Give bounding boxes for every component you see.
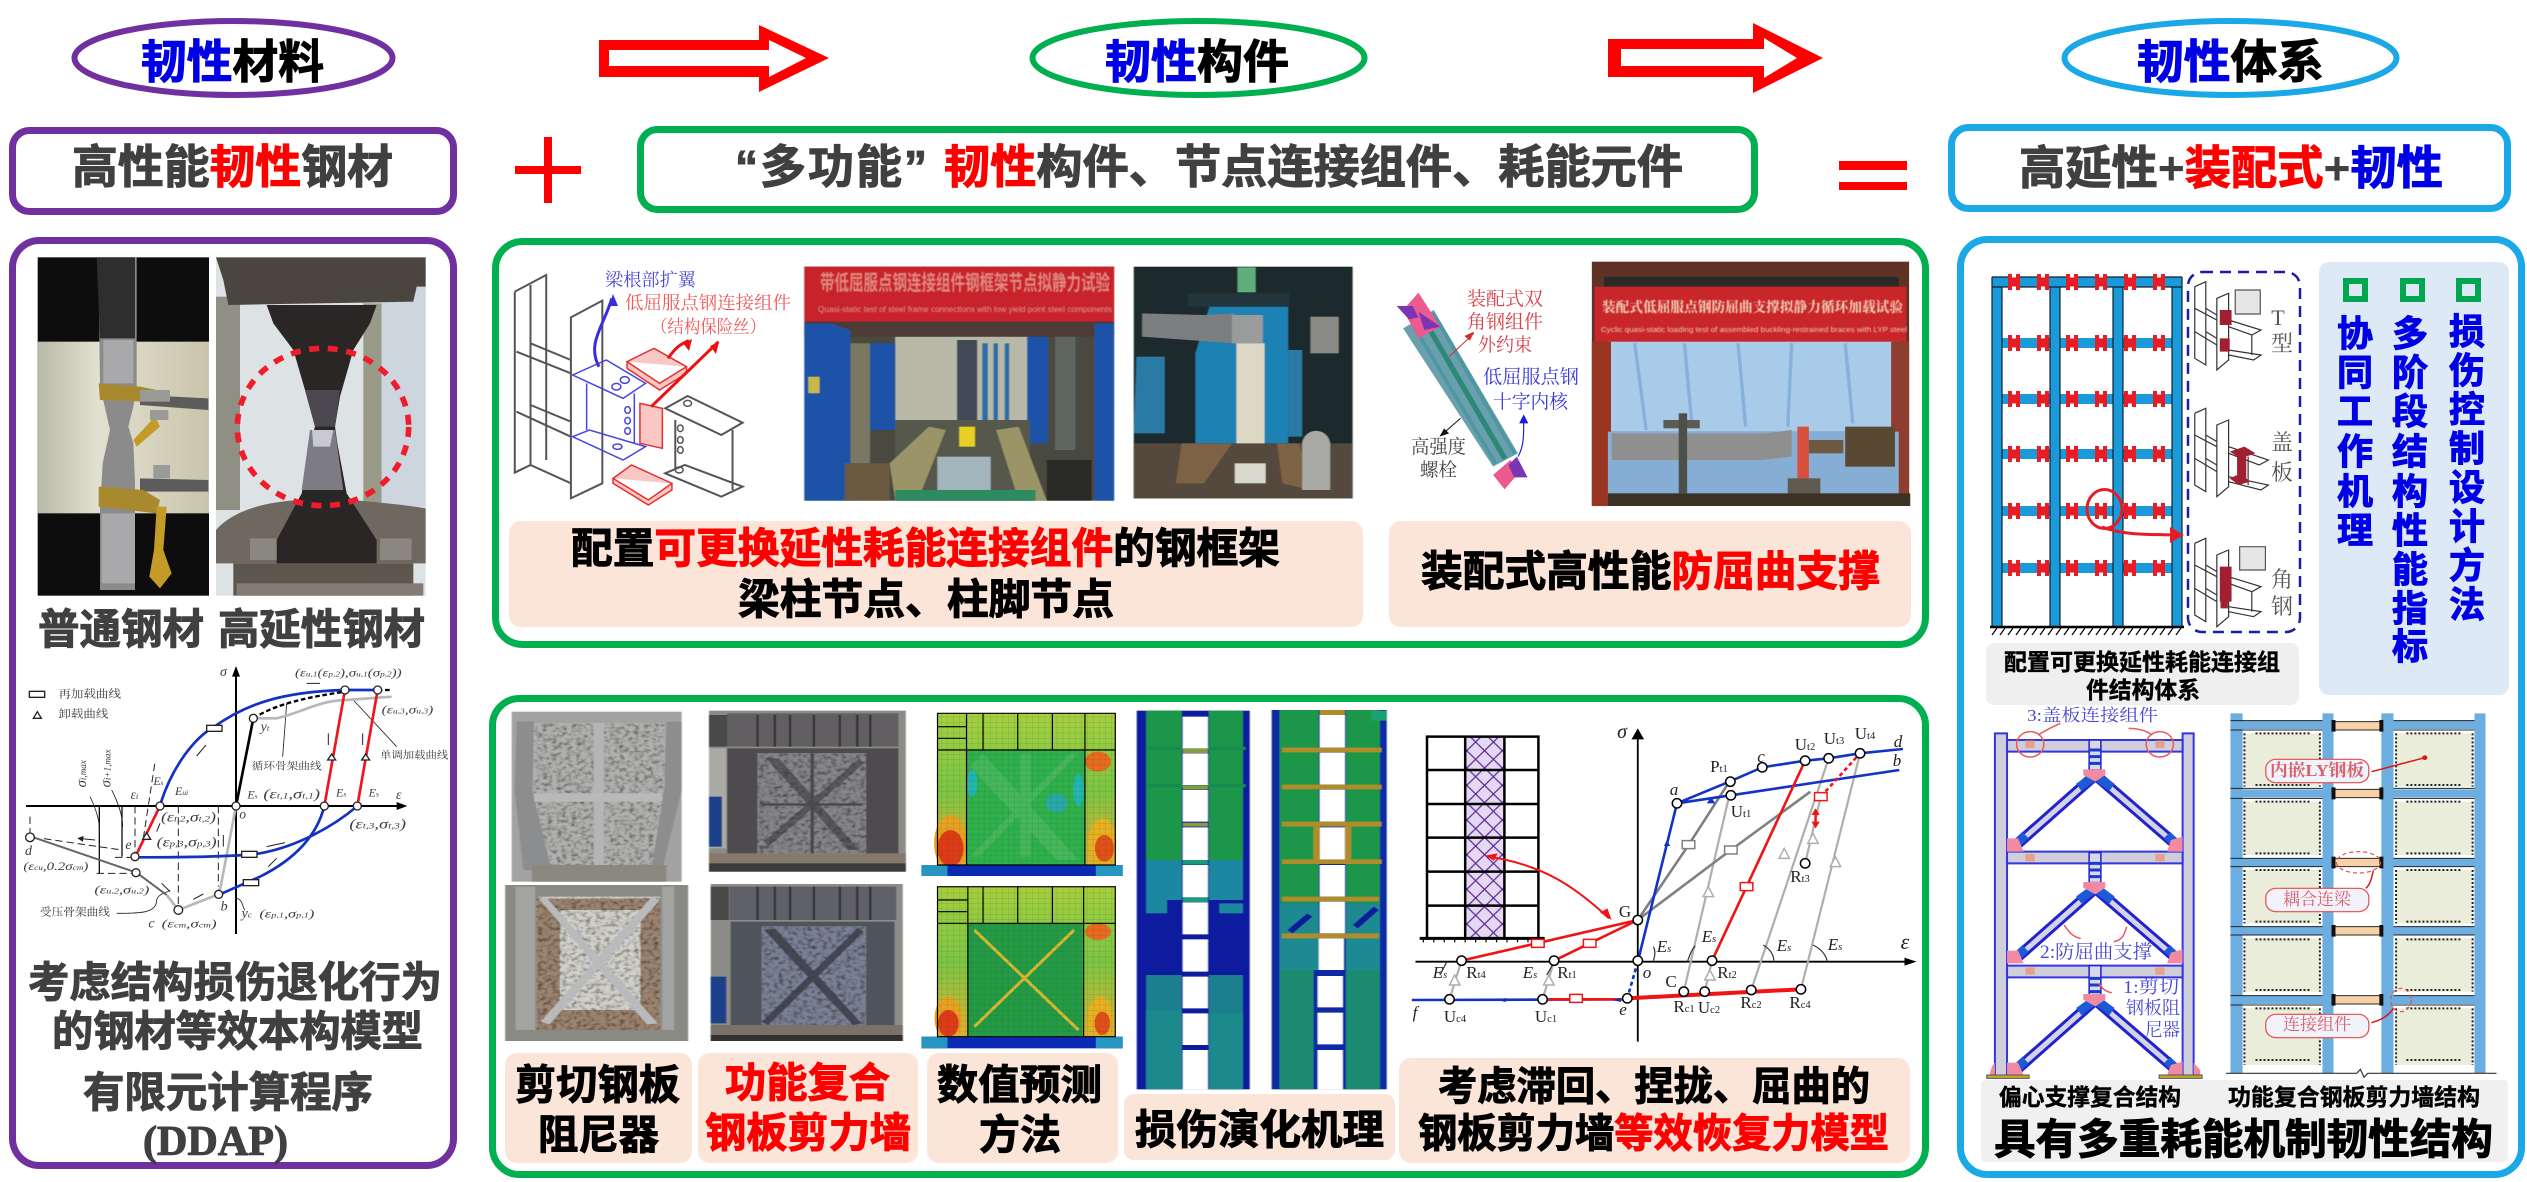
bullet list column: 多阶段结构性能指标: 多 [2392, 313, 2428, 354]
photo: beam-column joint test: Quasi-static test of steel frame connections with low yield point steel components [818, 305, 1112, 314]
caption: 剪切钢板阻尼器: 剪切钢板 [515, 1062, 680, 1108]
diagram: composite steel plate shear wall structure [2226, 713, 2497, 1077]
photo: beam-column joint test [804, 267, 1114, 501]
chart: equivalent restoring force model: Rt3 [1790, 867, 1810, 886]
chart: cyclic stress-strain constitutive model: o [239, 806, 246, 821]
caption: structure names and title [1981, 1080, 2508, 1163]
chart: cyclic stress-strain constitutive model: (εu,3,σu,3) [382, 702, 433, 716]
chart: equivalent restoring force model: Pt1 [1710, 757, 1728, 776]
chart: equivalent restoring force model [1412, 721, 1917, 1042]
caption: replaceable connection system: 配置可更换延性耗能连接组 [2004, 649, 2280, 675]
chart: cyclic stress-strain constitutive model: c [148, 916, 155, 931]
text: steel constitutive model: 考虑结构损伤退化行为 [28, 959, 442, 1006]
chart: equivalent restoring force model: Ut2 [1795, 735, 1815, 754]
bullet list column: 损伤控制设计方法: 计 [2449, 506, 2485, 547]
axes [26, 672, 402, 934]
chart: cyclic stress-strain constitutive model: σ [220, 665, 228, 680]
photo: brace cyclic test [1592, 262, 1910, 506]
caption: 功能复合钢板剪力墙: 功能复合 [725, 1060, 890, 1106]
chart: equivalent restoring force model: G [1619, 902, 1631, 921]
arrow: components to system [1608, 23, 1823, 93]
photo: composite steel plate shear wall [709, 711, 906, 1041]
chart: damage evolution frames [1137, 710, 1387, 1089]
photo: high ductility steel specimen [216, 257, 426, 596]
chart: cyclic stress-strain constitutive model: yt [259, 720, 270, 735]
chart: equivalent restoring force model: o [1643, 963, 1651, 982]
chart: cyclic stress-strain constitutive model: Eui [174, 784, 188, 798]
chart: cyclic stress-strain constitutive model: e [125, 838, 132, 853]
text: steel constitutive model: 的钢材等效本构模型 [52, 1008, 423, 1055]
chart: cyclic stress-strain constitutive model: (εcm,σcm) [162, 916, 217, 930]
chart: cyclic stress-strain constitutive model: (εt,3,σt,3) [349, 816, 407, 831]
diagram: eccentric brace composite structure: 钢板阻 [2126, 998, 2180, 1018]
chart: cyclic stress-strain constitutive model: (εp,3,σp,3) [157, 835, 217, 850]
chart: equivalent restoring force model: Es [1701, 927, 1716, 946]
photo: ordinary steel specimen [38, 257, 209, 596]
label: ordinary steel: 普通钢材 [38, 606, 204, 653]
heading oval: 韧性材料 [74, 21, 392, 95]
diagram: assembled buckling-restrained brace: 十字内核 [1493, 391, 1569, 413]
diagram: eccentric brace composite structure: 3:盖板连接组件 [2027, 706, 2158, 725]
caption: replaceable ductile connection [509, 521, 1363, 627]
bullet list column: 多阶段结构性能指标: 性 [2392, 510, 2428, 551]
diagram: composite steel plate shear wall structure: 连接组件 [2283, 1015, 2351, 1034]
bullet list column: 损伤控制设计方法: 控 [2449, 389, 2485, 430]
chart: equivalent restoring force model: Es [1432, 963, 1447, 982]
chart: cyclic stress-strain constitutive model: σi,max [74, 760, 90, 787]
chart: equivalent restoring force model: Uc4 [1444, 1007, 1467, 1026]
chart: cyclic stress-strain constitutive model: (εt,1,σt,1) [263, 786, 321, 801]
bullet list column: 协同工作机理: 机 [2337, 471, 2373, 512]
chart: equivalent restoring force model: Rt4 [1466, 963, 1486, 982]
caption: 数值预测方法: 数值预测 [937, 1062, 1102, 1108]
chart: equivalent restoring force model: C [1665, 972, 1677, 991]
chart: equivalent restoring force model: Es [1776, 936, 1791, 955]
heading oval: 韧性体系: 韧性体系 [2137, 36, 2324, 88]
diagram: assembled buckling-restrained brace: 低屈服点钢 [1483, 366, 1579, 388]
caption: 等效恢复力模型: 钢板剪力墙等效恢复力模型 [1418, 1112, 1889, 1156]
chart: equivalent restoring force model: Rt2 [1717, 963, 1737, 982]
diagram: connection types T, cover plate, angle [2188, 272, 2300, 632]
caption: replaceable connection system [1986, 643, 2299, 705]
caption: 等效恢复力模型 [1399, 1058, 1910, 1163]
chart: cyclic stress-strain constitutive model: d [25, 844, 33, 859]
diagram: assembled buckling-restrained brace: 螺栓 [1420, 459, 1457, 481]
bullet list column: 协同工作机理 [2337, 281, 2373, 551]
bullet list column: 多阶段结构性能指标: 标 [2392, 626, 2428, 667]
diagram: assembled buckling-restrained brace [1397, 288, 1579, 489]
caption: 功能复合钢板剪力墙: 钢板剪力墙 [705, 1110, 911, 1156]
photo: brace cyclic test: 装配式低屈服点钢防屈曲支撑拟静力循环加载试验 [1602, 299, 1903, 316]
caption: 功能复合钢板剪力墙 [698, 1053, 918, 1163]
chart: cyclic stress-strain constitutive model: (εu,2,σu,2) [94, 882, 149, 896]
panel: resilient structural system [1960, 240, 2522, 1174]
bullet list column: 多阶段结构性能指标: 指 [2392, 588, 2428, 629]
diagram: steel frame with replaceable connections [1990, 276, 2184, 635]
inset frame with shear wall [1420, 737, 1545, 942]
heading oval: 韧性构件: 韧性构件 [1105, 36, 1289, 88]
text: steel constitutive model [28, 959, 442, 1055]
heading oval: 韧性材料: 韧性材料 [141, 36, 324, 88]
chart: equivalent restoring force model: d [1894, 732, 1903, 751]
chart: numerical simulation contours [921, 713, 1123, 1048]
chart: equivalent restoring force model: Uc1 [1535, 1007, 1557, 1026]
diagram: eccentric brace composite structure [1987, 706, 2202, 1078]
chart: equivalent restoring force model: Rt1 [1557, 963, 1577, 982]
bullet list column: 损伤控制设计方法 [2449, 281, 2485, 625]
caption: 等效恢复力模型: 考虑滞回、捏拢、屈曲的 [1438, 1065, 1870, 1109]
banner: 多功能韧性构件 [640, 130, 1754, 210]
label: high ductility steel: 高延性钢材 [218, 606, 425, 653]
plus sign [515, 137, 581, 203]
chart: equivalent restoring force model: Es [1522, 963, 1537, 982]
chart: equivalent restoring force model: Rc2 [1740, 993, 1762, 1012]
caption: 数值预测方法: 方法 [979, 1112, 1061, 1158]
chart: cyclic stress-strain constitutive model: σi+1,max [99, 750, 115, 787]
diagram: replaceable beam-column connection: 梁根部扩翼 [605, 269, 697, 290]
heading oval: 韧性体系 [2064, 21, 2396, 95]
bullet list column: 损伤控制设计方法: 法 [2449, 584, 2485, 625]
caption: replaceable ductile connection: 配置可更换延性耗能连接组件的钢框架 [571, 525, 1280, 572]
caption: replaceable connection system: 件结构体系 [2086, 677, 2200, 703]
diagram: assembled buckling-restrained brace: 外约束 [1478, 334, 1532, 356]
bullet list column: 多阶段结构性能指标: 段 [2392, 391, 2428, 432]
bullet list column: 协同工作机理: 工 [2337, 391, 2373, 432]
photo: beam-column joint test: 带低屈服点钢连接组件钢框架节点拟静力试验 [820, 271, 1110, 295]
diagram: eccentric brace composite structure: 尼器 [2145, 1020, 2180, 1040]
chart: cyclic stress-strain constitutive model: 卸载曲线 [58, 708, 109, 721]
chart: cyclic stress-strain constitutive model: (εcu,0.2σ cm) [23, 859, 88, 873]
caption: buckling-restrained brace [1389, 521, 1911, 627]
text: finite element program: 有限元计算程序 [83, 1069, 373, 1116]
caption: structure names and title: 偏心支撑复合结构 [1999, 1084, 2181, 1110]
chart: equivalent restoring force model: Ut3 [1824, 729, 1844, 748]
diagram: assembled buckling-restrained brace: 高强度 [1411, 436, 1466, 458]
bullet list column: 协同工作机理: 理 [2337, 510, 2373, 551]
bullet list column: 多阶段结构性能指标: 能 [2392, 549, 2428, 590]
chart: equivalent restoring force model: Ut4 [1855, 724, 1876, 743]
caption: 损伤演化机理: 损伤演化机理 [1135, 1107, 1384, 1153]
chart: cyclic stress-strain constitutive model: Es [246, 787, 258, 801]
chart: equivalent restoring force model: Rc1 [1673, 997, 1695, 1016]
heading oval: 韧性构件 [1032, 21, 1364, 95]
diagram: assembled buckling-restrained brace: 角钢组件 [1467, 311, 1543, 333]
diagram: connection types T, cover plate, angle: 角 [2271, 567, 2293, 592]
chart: equivalent restoring force model: Uc2 [1698, 998, 1720, 1017]
bullet list column: 协同工作机理: 同 [2337, 352, 2373, 393]
chart: cyclic stress-strain constitutive model: (εt,2,σt,2) [161, 810, 217, 825]
banner: 高性能韧性钢材 [12, 130, 454, 212]
bullet list column: 协同工作机理: 协 [2337, 313, 2373, 354]
diagram: replaceable beam-column connection: （结构保险丝） [651, 317, 766, 337]
chart: cyclic stress-strain constitutive model: b [221, 900, 228, 915]
diagram: composite steel plate shear wall structure: 内嵌LY钢板 [2270, 760, 2364, 780]
caption: 数值预测方法 [927, 1053, 1118, 1163]
chart: cyclic stress-strain constitutive model [23, 665, 448, 934]
chart: cyclic stress-strain constitutive model: (εp,1,σp,1) [259, 906, 314, 920]
chart: cyclic stress-strain constitutive model: (εu,1(εp,2),σu,1(σp,2)) [295, 666, 402, 680]
banner: 多功能韧性构件: “多功能” [735, 141, 927, 193]
chart: cyclic stress-strain constitutive model: 单调加载曲线 [380, 748, 448, 761]
diagram: eccentric brace composite structure: 1:剪切 [2123, 977, 2179, 997]
text: finite element program: (DDAP) [143, 1119, 288, 1165]
diagram: connection types T, cover plate, angle: 钢 [2271, 594, 2293, 619]
chart: equivalent restoring force model: Es [1827, 935, 1842, 954]
bullet list column: 协同工作机理: 作 [2337, 431, 2373, 472]
chart: cyclic stress-strain constitutive model: yc [240, 906, 252, 921]
callout: design methods [2319, 262, 2509, 695]
text: finite element program [83, 1069, 373, 1165]
bullet list column: 多阶段结构性能指标: 阶 [2392, 352, 2428, 393]
diagram: replaceable beam-column connection: 低屈服点钢连接组件 [625, 293, 791, 313]
chart: equivalent restoring force model: Ut1 [1731, 802, 1751, 821]
diagram: connection types T, cover plate, angle: T [2271, 305, 2285, 330]
chart: equivalent restoring force model: σ [1617, 721, 1628, 743]
chart: cyclic stress-strain constitutive model: ε [396, 788, 402, 803]
bullet list column: 多阶段结构性能指标 [2392, 281, 2428, 667]
chart: equivalent restoring force model: Es [1656, 937, 1671, 956]
diagram: connection types T, cover plate, angle: 盖 [2271, 430, 2293, 455]
panel: shear wall components [492, 698, 1926, 1174]
bullet list column: 多阶段结构性能指标: 结 [2392, 431, 2428, 472]
bullet list column: 损伤控制设计方法: 伤 [2449, 350, 2485, 391]
chart: equivalent restoring force model: e [1619, 1000, 1627, 1019]
caption: 剪切钢板阻尼器: 阻尼器 [538, 1112, 659, 1158]
caption: buckling-restrained brace: 装配式高性能防屈曲支撑 [1421, 548, 1880, 595]
banner: 多功能韧性构件: 韧性构件、节点连接组件、耗能元件 [944, 141, 1683, 193]
banner: 高延性装配式韧性 [1952, 128, 2508, 208]
panel: connection and brace components [496, 242, 1926, 644]
banner: 高性能韧性钢材: 高性能韧性钢材 [72, 141, 393, 193]
caption: replaceable ductile connection: 梁柱节点、柱脚节点 [738, 576, 1114, 623]
caption: 剪切钢板阻尼器 [505, 1053, 692, 1163]
chart: cyclic stress-strain constitutive model: Es [368, 786, 379, 800]
chart: equivalent restoring force model: f [1413, 1003, 1420, 1022]
caption: structure names and title: 具有多重耗能机制韧性结构 [1994, 1116, 2493, 1163]
chart: equivalent restoring force model: ε [1901, 929, 1910, 954]
chart: cyclic stress-strain constitutive model: 再加载曲线 [58, 687, 121, 700]
bullet list column: 损伤控制设计方法: 制 [2449, 428, 2485, 469]
diagram: assembled buckling-restrained brace: 装配式双 [1467, 288, 1543, 310]
caption: 损伤演化机理 [1124, 1094, 1395, 1160]
chart: equivalent restoring force model: c [1757, 747, 1765, 766]
diagram: connection types T, cover plate, angle: 板 [2271, 460, 2293, 485]
photo: brace cyclic test: Cyclic quasi-static loading test of assembled buckling-restrained braces with LYP steel [1601, 327, 1907, 334]
equals sign [1839, 161, 1907, 190]
chart: cyclic stress-strain constitutive model: Es [335, 786, 346, 800]
bullet list column: 损伤控制设计方法: 设 [2449, 467, 2485, 508]
photo: shear steel plate damper [505, 712, 688, 1041]
caption: structure names and title: 功能复合钢板剪力墙结构 [2228, 1084, 2480, 1110]
chart: equivalent restoring force model: a [1670, 780, 1678, 799]
chart: equivalent restoring force model: Rc4 [1789, 993, 1811, 1012]
diagram: connection types T, cover plate, angle: 型 [2271, 331, 2293, 356]
chart: equivalent restoring force model: b [1893, 751, 1901, 770]
chart: cyclic stress-strain constitutive model: 受压骨架曲线 [40, 906, 110, 919]
banner: 高延性装配式韧性: 高延性+装配式+韧性 [2019, 142, 2443, 194]
diagram: composite steel plate shear wall structure: 耦合连梁 [2283, 889, 2352, 909]
bullet list column: 损伤控制设计方法: 损 [2449, 311, 2485, 352]
chart: cyclic stress-strain constitutive model: εi [131, 787, 139, 802]
chart: cyclic stress-strain constitutive model: Es [152, 774, 164, 788]
bullet list column: 损伤控制设计方法: 方 [2449, 545, 2485, 586]
photo: column base test [1134, 267, 1353, 498]
arrow: materials to components [599, 25, 829, 92]
diagram: replaceable beam-column connection [515, 269, 791, 505]
bullet list column: 多阶段结构性能指标: 构 [2392, 471, 2428, 512]
chart: cyclic stress-strain constitutive model: 循环骨架曲线 [252, 759, 322, 772]
diagram: eccentric brace composite structure: 2:防屈曲支撑 [2040, 941, 2152, 963]
panel: materials [12, 240, 454, 1166]
